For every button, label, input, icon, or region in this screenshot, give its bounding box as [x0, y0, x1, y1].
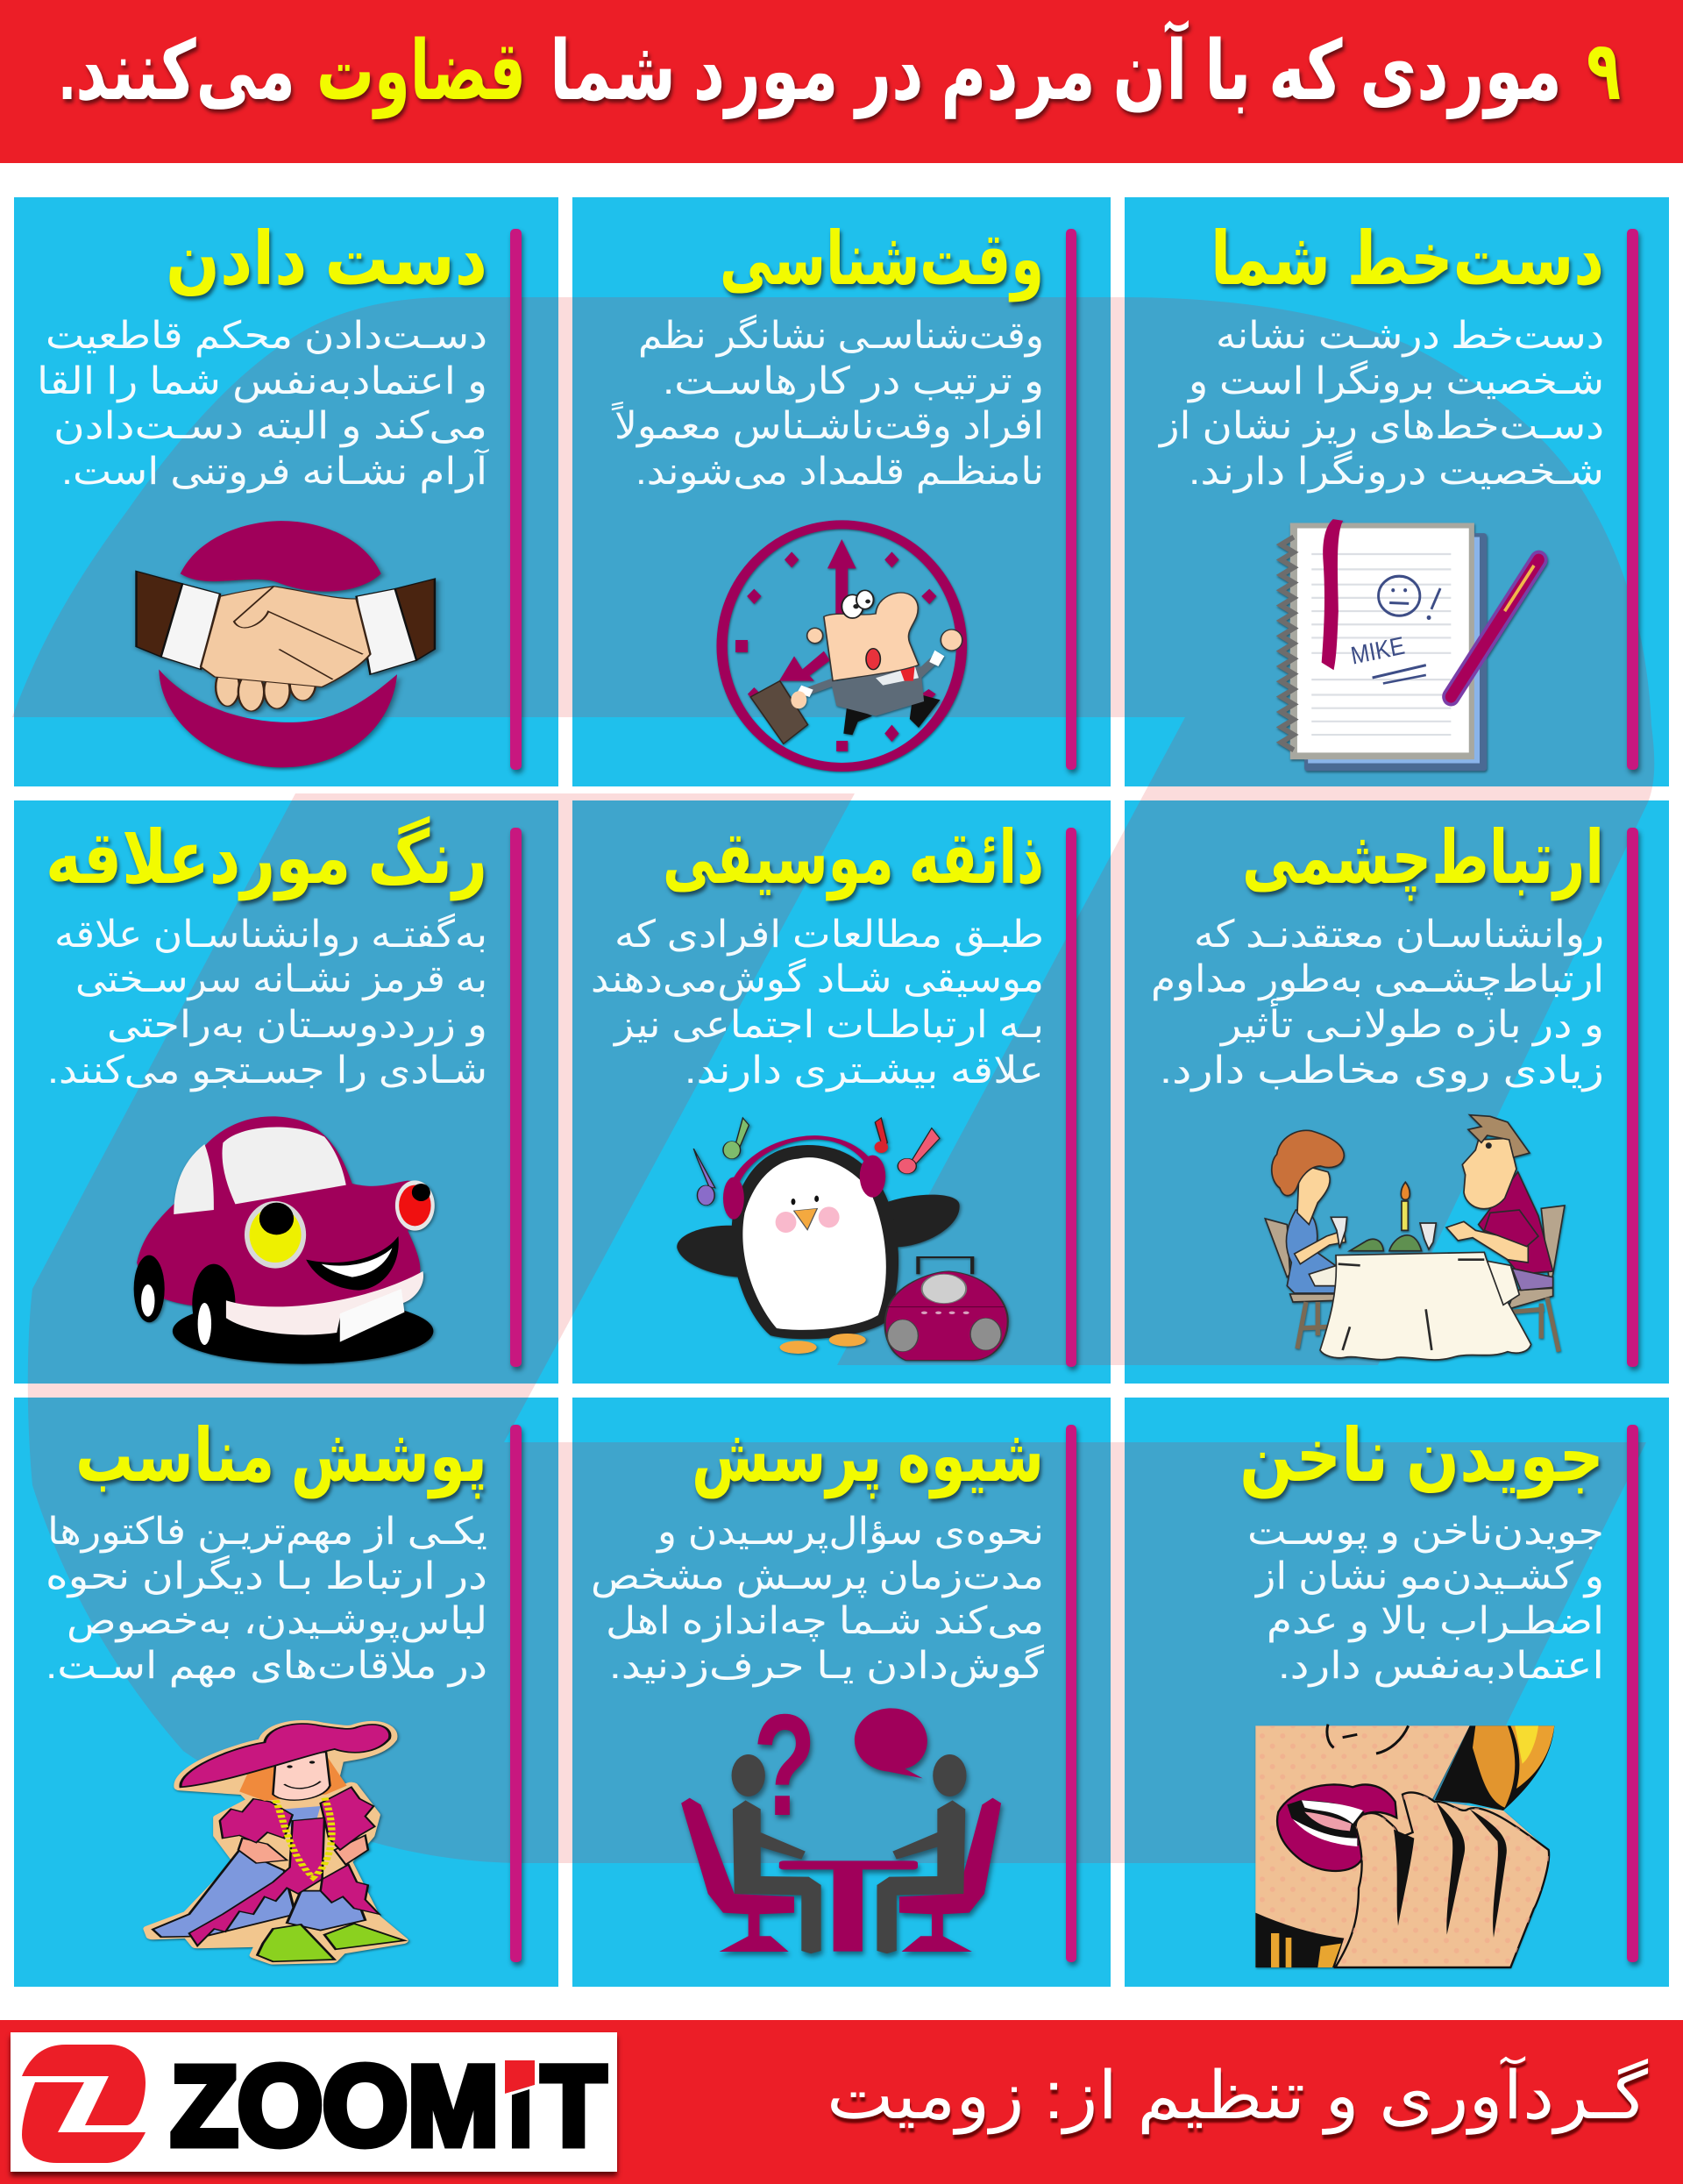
body text: طبـق مطالعات افرادی که: [614, 914, 1044, 957]
body text: علاقه بیشـتری دارند.: [685, 1049, 1044, 1092]
panel: asking questions: [572, 1398, 1111, 1987]
body text: مدت‌زمان پرسـش مشخص: [591, 1555, 1044, 1598]
footer banner: [0, 2020, 1683, 2184]
body text: و در بازه طولانـی تأثیر: [1219, 998, 1604, 1047]
body text: اعتمادبه‌نفس دارد.: [1278, 1645, 1604, 1687]
heading: پوشش مناسب: [75, 1414, 487, 1499]
logo wordmark: I: [509, 2044, 532, 2169]
icon: smiling magenta car: [134, 1116, 435, 1364]
body text: به‌گفتـه روانشناسـان علاقه: [54, 913, 487, 957]
body text: [591, 1511, 1045, 1688]
body text: نامنظـم قلمداد می‌شوند.: [636, 451, 1044, 494]
panel: dressing well: [14, 1398, 558, 1987]
watermark: logo tint over the panels: [12, 297, 1654, 1863]
body text: و اعتمادبه‌نفس شما را القا: [37, 360, 487, 403]
heading: رنگ موردعلاقه: [46, 815, 487, 901]
body text: یکـی از مهم‌تریـن فاکتورها: [47, 1511, 487, 1554]
icon: handshake: [137, 521, 435, 767]
title: [59, 19, 1621, 120]
accent bar: [1066, 229, 1076, 770]
accent bar: [510, 1425, 522, 1962]
title: قضاوت: [316, 25, 526, 119]
panel: music taste: [572, 800, 1111, 1384]
watermark: pale logo in the gaps: [12, 297, 1654, 1863]
body text: می‌کند شـما چه‌اندازه اهل: [606, 1600, 1044, 1642]
body text: به قرمز نشـانه سرسـختی: [75, 958, 487, 1001]
title: می‌کنند.: [59, 25, 295, 117]
icon: question mark: ?: [753, 1684, 816, 1846]
logo mark: [22, 2045, 146, 2163]
logo wordmark: T: [542, 2044, 606, 2169]
body text: افراد وقت‌ناشـناس معمولاً: [611, 402, 1044, 448]
accent bar: [510, 229, 522, 770]
accent bar: [510, 828, 522, 1367]
body text: در ارتباط بـا دیگران نحوه: [46, 1554, 487, 1598]
credit text: گـردآوری و تنظیم از: زومیت: [827, 2056, 1649, 2135]
body text: [37, 315, 489, 494]
body text: لباس‌پوشـیدن، به‌خصوص: [67, 1600, 487, 1643]
panel: punctuality: [572, 197, 1111, 786]
heading: جویدن ناخن: [1239, 1414, 1604, 1499]
body text: آرام نشـانه فروتنی است.: [61, 448, 489, 494]
speech bubble: [855, 1708, 927, 1778]
body text: دسـت‌خط‌های ریز نشان از: [1158, 405, 1604, 448]
body text: و زرددوسـتان به‌راحتی: [107, 1004, 487, 1047]
body text: [1247, 1511, 1604, 1687]
icon: girl in hat and feather boa: [150, 1724, 404, 1961]
body text: اضطـراب بالا و عدم: [1267, 1600, 1604, 1643]
body text: جویدن‌ناخن و پوسـت: [1247, 1511, 1604, 1554]
accent bar: [1627, 828, 1638, 1367]
body text: و کشـیدن‌مو نشان از: [1254, 1555, 1604, 1598]
heading: دست دادن: [166, 217, 487, 300]
heading: شیوه پرسش: [692, 1414, 1044, 1499]
icon: woman biting her nails: [1255, 1725, 1554, 1967]
panel: handshake: [14, 197, 558, 786]
body text: شـادی را جسـتجو می‌کنند.: [47, 1049, 487, 1092]
icon: businessman running across a clock: [722, 524, 962, 767]
logo box: [11, 2032, 617, 2172]
body text: [1158, 315, 1604, 494]
body text: [591, 914, 1044, 1092]
accent bar: [1066, 828, 1076, 1367]
icon: notebook and pen: [1282, 519, 1538, 771]
panel: nail biting: [1125, 1398, 1669, 1987]
accent bar: [1627, 1425, 1638, 1962]
body text: زیادی روی مخاطب دارد.: [1160, 1049, 1604, 1092]
body text: موسیقی شـاد گوش‌می‌دهند: [591, 957, 1044, 1001]
icon: two people talking at a table: [681, 1684, 1001, 1953]
accent bar: [1066, 1425, 1076, 1962]
body text: [47, 913, 487, 1092]
panel: eye contact: [1125, 800, 1669, 1384]
body text: نحوه‌ی سؤال‌پرسـیدن و: [656, 1511, 1044, 1554]
body text: وقت‌شناسـی نشانگر نظم: [638, 314, 1044, 358]
body text: شـخصیت درونگرا دارند.: [1189, 450, 1604, 494]
body text: دست‌خط درشـت نشانه: [1216, 315, 1604, 357]
body text: ارتباط‌چشـمی به‌طور مداوم: [1151, 958, 1604, 1001]
body text: روانشناسـان معتقدنـد که: [1194, 914, 1604, 957]
body text: در ملاقات‌های مهم اسـت.: [46, 1645, 487, 1688]
header banner: [0, 0, 1683, 163]
accent bar: [1627, 229, 1638, 770]
body text: [46, 1511, 487, 1688]
title: ۹: [1587, 25, 1621, 117]
icon: notebook and pen: MIKE: [1349, 631, 1407, 670]
body text: شـخصیت برونگرا است و: [1187, 359, 1604, 403]
icon: couple at a dinner table: [1265, 1115, 1565, 1360]
body text: بـه ارتباطـات اجتماعی نیز: [613, 1004, 1044, 1047]
body text: دسـت‌دادن محکم قاطعیت: [46, 315, 487, 358]
icon: penguin with headphones and boombox: [677, 1118, 1008, 1361]
peach sticker outline: [150, 1724, 401, 1961]
heading: وقت‌شناسی: [720, 217, 1044, 302]
panel: handwriting: [1125, 197, 1669, 786]
body text: [611, 314, 1044, 494]
body text: [1151, 914, 1604, 1092]
body text: و ترتیب در کارهاسـت.: [663, 360, 1044, 403]
logo wordmark: ZOOM: [171, 2044, 499, 2169]
panel: favourite colour: [14, 800, 558, 1384]
heading: ذائقه موسیقی: [663, 816, 1044, 901]
body text: می‌کند و البته دسـت‌دادن: [53, 405, 487, 448]
body text: گوش‌دادن یـا حرف‌زدنید.: [609, 1644, 1045, 1688]
